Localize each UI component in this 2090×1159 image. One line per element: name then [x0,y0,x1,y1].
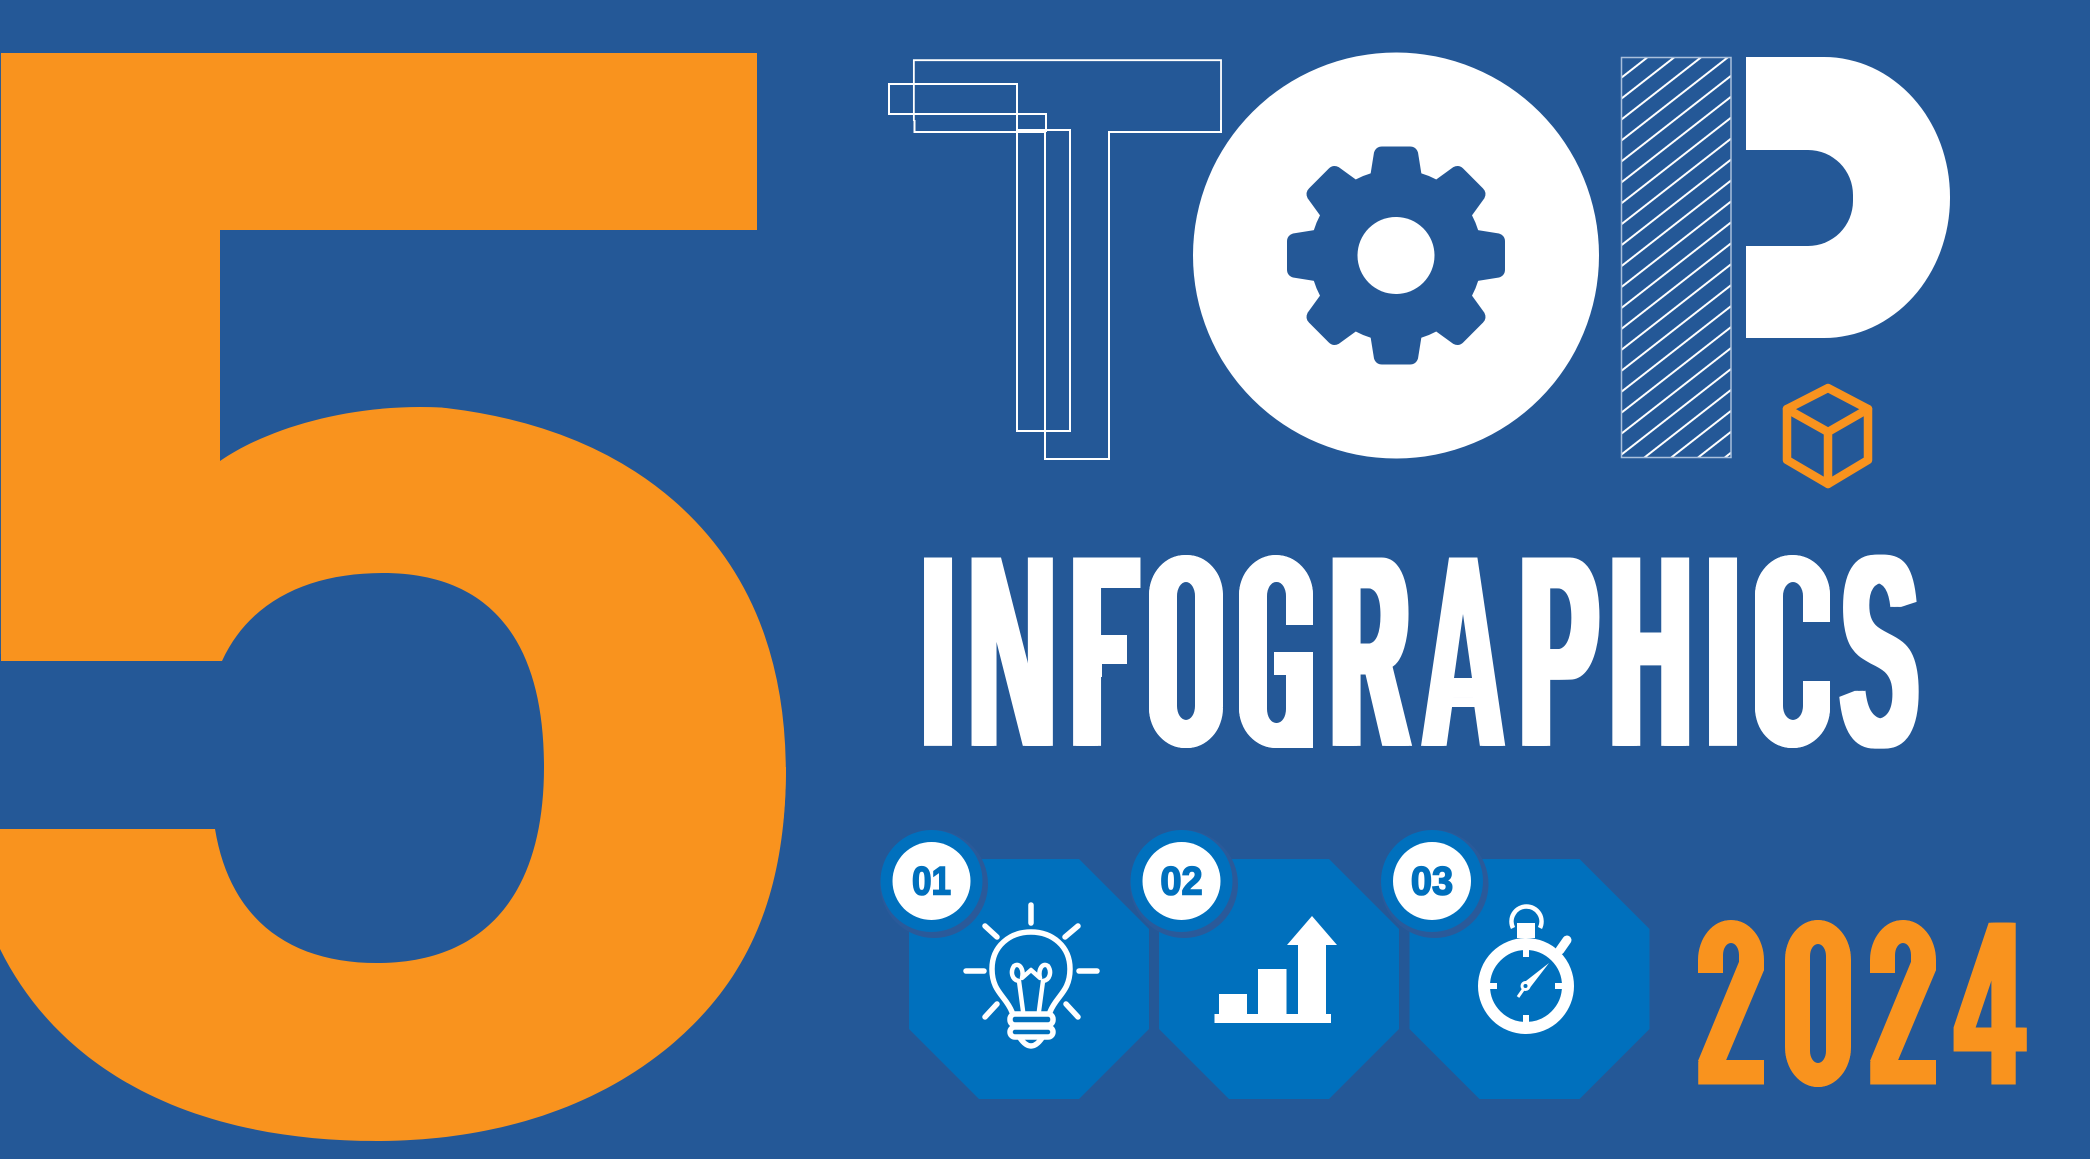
year: 2024: 4 [1956,871,2023,1134]
heading: INFOGRAPHICS: S [1841,498,1918,804]
badge 02 [1130,830,1238,938]
heading: INFOGRAPHICS: F [1072,498,1138,804]
heading: INFOGRAPHICS: A [1423,498,1504,804]
icon: orange cube [1787,388,1868,484]
badge 02: 02 [1160,860,1203,904]
letter O with gear [1193,52,1599,458]
octagon 2 [1159,859,1399,1099]
heading: INFOGRAPHICS [911,498,1919,804]
heading: INFOGRAPHICS: I [911,498,965,804]
echo outline of letter T [889,84,1070,431]
badge 01: 01 [912,858,951,903]
panel: step 2 [1130,830,1399,1099]
badge 03 [1380,830,1488,938]
icon: growth chart with arrow [1214,916,1337,1023]
hatched stem of letter P [1622,58,1731,458]
year: 2024 [1698,871,2027,1134]
lower part of letter T outline [910,120,1225,463]
icon: stopwatch [1484,906,1568,1028]
heading: INFOGRAPHICS: H [1611,498,1690,804]
panel: step 3 [1380,830,1650,1099]
icon: light bulb [966,905,1097,1046]
heading: INFOGRAPHICS: N [968,498,1057,804]
badge 01 [880,830,988,938]
octagon 3 [1410,859,1650,1099]
icon: gear [1287,146,1505,364]
octagon 1 [909,859,1149,1099]
panel: step 1 [880,830,1149,1099]
heading: INFOGRAPHICS: P [1520,498,1598,804]
badge 03: 03 [1411,860,1453,904]
heading: INFOGRAPHICS: I [1696,498,1750,804]
heading: INFOGRAPHICS: R [1332,498,1408,804]
